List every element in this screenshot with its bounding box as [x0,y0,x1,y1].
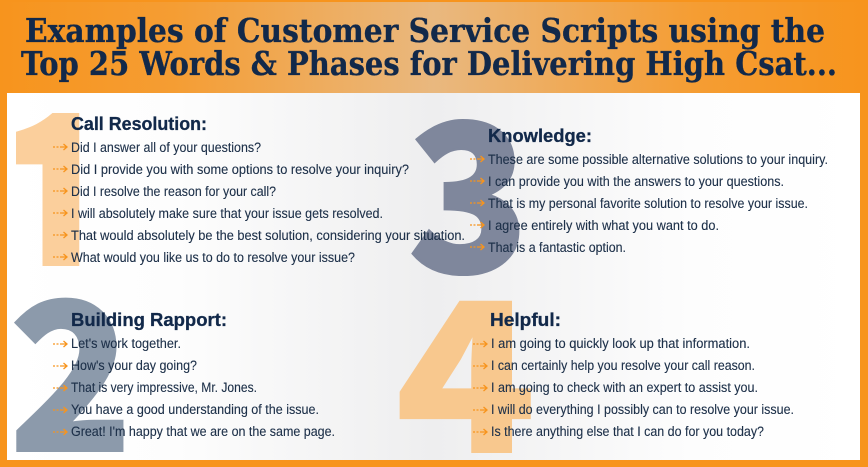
list: helpful: I can certainly help you resolve your call reason. [491,358,755,373]
list: building rapport [53,336,335,439]
list: knowledge: I can provide you with the answers to your questions. [488,174,784,189]
list: call resolution: Did I provide you with some options to resolve your inquiry? [71,162,409,177]
list: knowledge: That is a fantastic option. [488,240,626,255]
list: knowledge: These are some possible alternative solutions to your inquiry. [488,152,828,167]
title [21,11,837,83]
list: call resolution: Did I answer all of your questions? [71,140,261,155]
heading: helpful: Helpful: [490,310,561,330]
section: knowledge [470,126,828,255]
list: helpful: I am going to check with an expert to assist you. [491,380,758,395]
numeral 1: 1 [0,0,116,389]
list: building rapport: That is very impressive, Mr. Jones. [71,380,257,395]
list: building rapport: Let's work together. [71,336,181,351]
heading: building rapport: Building Rapport: [71,310,227,330]
list: building rapport: You have a good understanding of the issue. [71,402,319,417]
list: call resolution: That would absolutely be the best solution, considering your situation. [71,228,465,243]
heading: knowledge: Knowledge: [488,126,592,146]
list: helpful [473,336,794,439]
list: knowledge [470,152,828,255]
list: call resolution: What would you like us to do to resolve your issue? [71,250,355,265]
heading: call resolution: Call Resolution: [71,114,207,134]
section: helpful [473,310,794,439]
list: call resolution: I will absolutely make sure that your issue gets resolved. [71,206,383,221]
list: helpful: Is there anything else that I can do for you today? [491,424,764,439]
section: call resolution [53,114,465,265]
list: helpful: I will do everything I possibly can to resolve your issue. [491,402,794,417]
list: helpful: I am going to quickly look up that information. [491,336,750,351]
list: call resolution [53,140,465,265]
list: building rapport: How's your day going? [71,358,197,373]
list: call resolution: Did I resolve the reason for your call? [71,184,276,199]
section: building rapport [53,310,335,439]
list: knowledge: I agree entirely with what you want to do. [488,218,719,233]
list: knowledge: That is my personal favorite solution to resolve your issue. [488,196,808,211]
list: building rapport: Great! I'm happy that we are on the same page. [71,424,335,439]
header gradient [0,2,868,93]
numeral 3: 3 [408,35,529,332]
content panel [7,93,860,460]
